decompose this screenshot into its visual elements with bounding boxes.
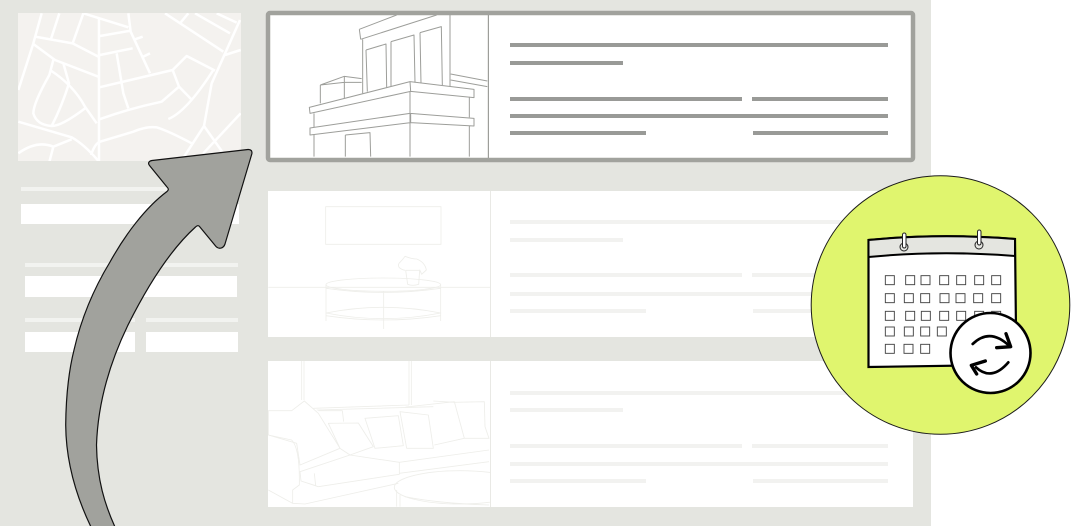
calendar page xyxy=(868,236,1016,367)
sofa sketch xyxy=(268,361,490,506)
card divider xyxy=(488,15,489,158)
table sketch xyxy=(268,207,490,329)
icon: recurring calendar badge xyxy=(811,176,1070,434)
calendar day grid xyxy=(885,276,1001,353)
left form fields xyxy=(21,187,239,352)
map panel xyxy=(18,13,241,173)
arrow pointing to highlighted card xyxy=(66,149,252,526)
text lines xyxy=(510,43,888,135)
faded listing card: table xyxy=(268,191,913,337)
faded listing card: sofa xyxy=(268,360,913,507)
building sketch xyxy=(309,15,487,157)
highlighted listing card xyxy=(268,13,913,160)
refresh arrows xyxy=(971,334,1011,374)
binder rings xyxy=(900,230,983,251)
card divider xyxy=(490,191,491,337)
text lines xyxy=(510,220,888,313)
refresh badge xyxy=(950,313,1030,393)
calendar header xyxy=(868,236,1015,257)
card divider xyxy=(490,361,491,507)
text lines xyxy=(510,391,888,483)
